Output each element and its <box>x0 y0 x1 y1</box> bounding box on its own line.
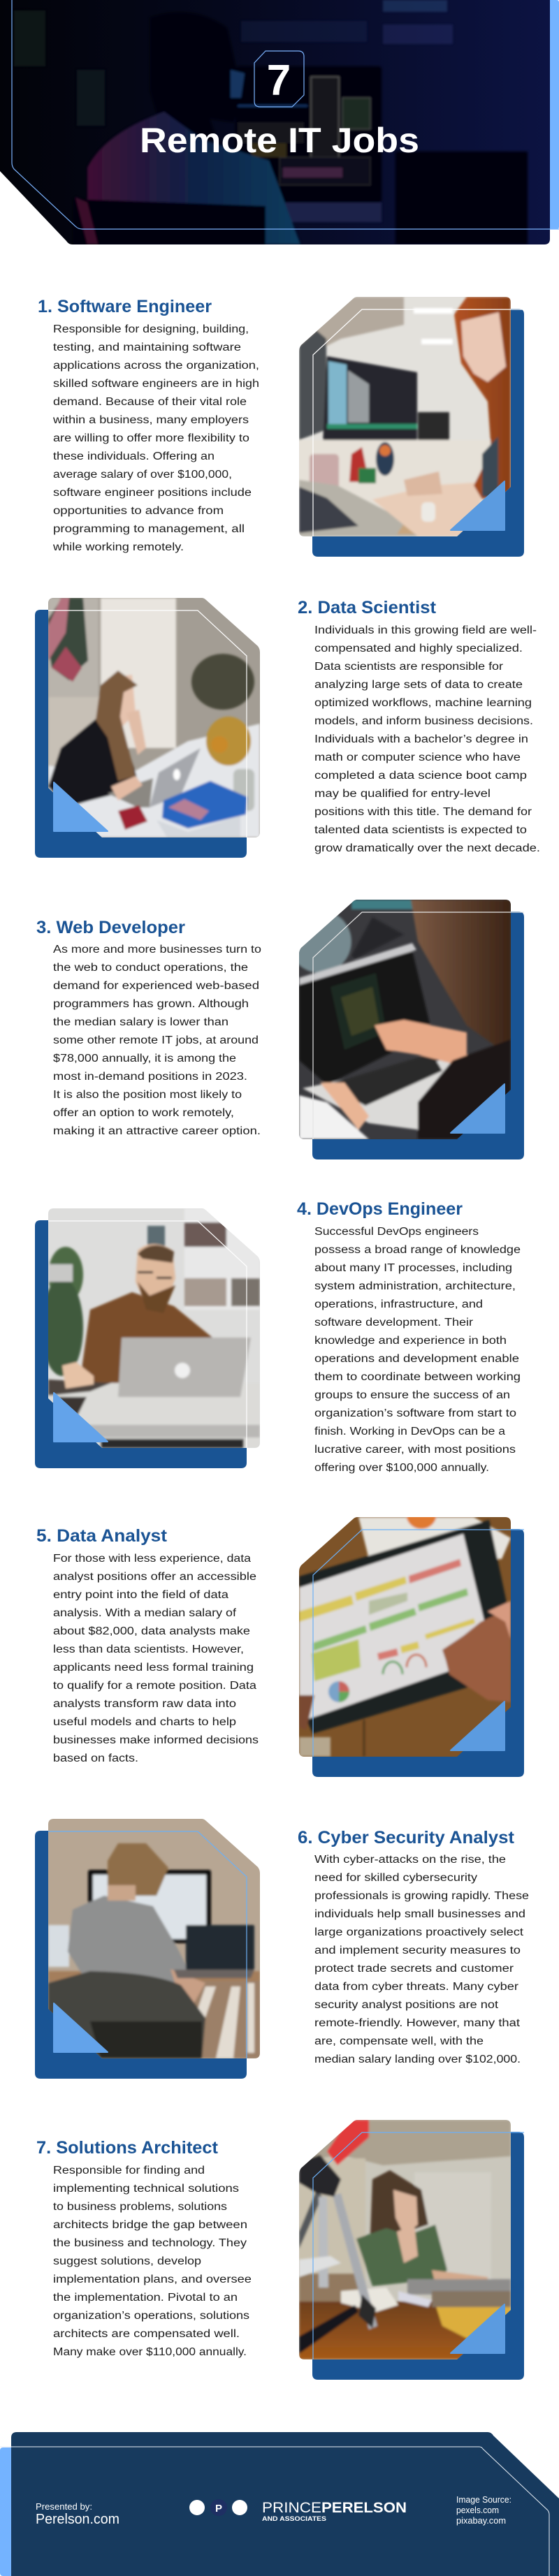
text block: some other remote IT jobs, at around <box>53 1034 259 1046</box>
panel: 4 devops engineer <box>35 1199 521 1474</box>
text block: grow dramatically over the next decade. <box>314 842 540 854</box>
text block: talented data scientists is expected to <box>314 824 527 836</box>
text block: less than data scientists. However, <box>53 1644 244 1655</box>
heading: 1. Software Engineer <box>38 297 212 316</box>
text block: finish. Working in DevOps can be a <box>314 1426 505 1437</box>
text block: positions with this title. The demand for <box>314 806 532 818</box>
panel: 6 cyber security analyst <box>35 1819 529 2079</box>
text block: and implement security measures to <box>314 1945 521 1956</box>
header outline <box>12 0 559 229</box>
text block: architects are compensated well. <box>53 2328 240 2340</box>
text block: within a business, many employers <box>52 414 249 426</box>
outline <box>313 2132 524 2359</box>
text block <box>53 944 261 1137</box>
text block <box>53 2165 252 2358</box>
text block: applicants need less formal training <box>53 1662 254 1674</box>
text block: applications across the organization, <box>53 360 259 372</box>
text block: analysis. With a median salary of <box>53 1607 237 1619</box>
text block: It is also the position most likely to <box>53 1089 242 1101</box>
text block: the business and technology. They <box>53 2237 247 2249</box>
number badge: 7 <box>267 57 291 105</box>
text block: For those with less experience, data <box>53 1553 251 1565</box>
text block: implementation plans, and oversee <box>53 2274 252 2285</box>
text block: $78,000 annually, it is among the <box>53 1053 236 1064</box>
text block: testing, and maintaining software <box>53 342 241 353</box>
footer outline <box>0 2447 549 2576</box>
outline <box>48 610 247 837</box>
text block: opportunities to advance from <box>53 505 224 517</box>
heading: 2. Data Scientist <box>298 598 437 617</box>
text block: individuals help small businesses and <box>314 1908 525 1920</box>
text block: analysts transform raw data into <box>53 1698 236 1710</box>
footer <box>0 2432 559 2576</box>
accent triangle <box>54 782 108 831</box>
text block: analyst positions offer an accessible <box>53 1571 256 1583</box>
photo card: woman at computer <box>299 297 524 557</box>
image sources: Image Source: <box>456 2494 511 2505</box>
text block: may be qualified for entry-level <box>314 788 491 800</box>
presented by: Presented by: <box>36 2501 92 2512</box>
text block: With cyber-attacks on the rise, the <box>314 1854 506 1866</box>
image sources: pexels.com <box>456 2505 499 2515</box>
text block: math or computer science who have <box>314 752 521 763</box>
text block: possess a broad range of knowledge <box>314 1244 521 1256</box>
accent triangle <box>54 1393 108 1442</box>
accent triangle <box>54 2003 108 2052</box>
text block: offer an option to work remotely, <box>53 1107 234 1119</box>
photo card: laptop with code <box>289 900 524 1159</box>
text block: offering over $100,000 annually. <box>314 1462 489 1474</box>
text block <box>314 1226 521 1474</box>
presented by: Perelson.com <box>36 2512 119 2527</box>
text block: compensated and highly specialized. <box>314 643 523 654</box>
accent triangle <box>451 2304 504 2353</box>
text block: useful models and charts to help <box>53 1716 236 1728</box>
text block: average salary of over $100,000, <box>53 469 232 481</box>
text block: to qualify for a remote position. Data <box>53 1680 256 1692</box>
header banner <box>0 0 559 244</box>
text block: software engineer positions include <box>53 487 252 499</box>
panel: 1 software engineer <box>38 297 524 557</box>
number badge <box>254 51 304 107</box>
heading: 5. Data Analyst <box>36 1526 168 1546</box>
text block: large organizations proactively select <box>314 1926 524 1938</box>
text block: the median salary is lower than <box>53 1016 228 1028</box>
text block: programming to management, all <box>53 523 245 535</box>
accent bar: header right <box>538 0 559 229</box>
text block: while working remotely. <box>52 541 184 553</box>
text block: implementing technical solutions <box>53 2183 239 2195</box>
text block: analyzing large sets of data to create <box>314 679 523 691</box>
text block: programmers has grown. Although <box>53 998 249 1010</box>
text block: median salary landing over $102,000. <box>314 2054 521 2065</box>
text block: Successful DevOps engineers <box>314 1226 479 1238</box>
text block: models, and inform business decisions. <box>314 715 533 727</box>
photo card: tablet with charts <box>299 1498 524 1777</box>
text block: Many make over $110,000 annually. <box>53 2346 247 2358</box>
outline <box>48 1831 247 2058</box>
text block: protect trade secrets and customer <box>314 1963 514 1975</box>
text block: As more and more businesses turn to <box>53 944 261 956</box>
outline <box>313 309 524 536</box>
text block: suggest solutions, develop <box>53 2255 201 2267</box>
panel: 7 solutions architect <box>36 2120 524 2380</box>
accent triangle <box>451 1084 504 1133</box>
image sources <box>456 2494 511 2526</box>
logo: prince perelson and associates: AND ASSOCIATES <box>262 2515 326 2523</box>
heading: 7. Solutions Architect <box>36 2138 219 2158</box>
text block: optimized workflows, machine learning <box>314 697 532 709</box>
text block: to business problems, solutions <box>53 2201 227 2213</box>
text block: most in-demand positions in 2023. <box>53 1071 247 1083</box>
text block: businesses make informed decisions <box>53 1734 259 1746</box>
text block: Responsible for finding and <box>53 2165 205 2176</box>
text block: the web to conduct operations, the <box>53 962 248 974</box>
text block: based on facts. <box>53 1752 138 1764</box>
text block: Individuals in this growing field are well- <box>314 624 537 636</box>
text block <box>52 323 259 553</box>
text block: Individuals with a bachelor’s degree in <box>314 733 528 745</box>
photo card: man with laptop <box>35 1208 260 1468</box>
photo card: woman with laptop <box>35 598 260 858</box>
photo card: person at desk from behind <box>35 1819 260 2079</box>
logo: prince perelson and associates: PERELSON <box>321 2500 407 2516</box>
text block: about many IT processes, including <box>314 1262 512 1274</box>
text block: these individuals. Offering an <box>53 451 215 462</box>
logo: prince perelson and associates <box>189 2499 407 2523</box>
text block: operations and development enable <box>314 1353 519 1365</box>
heading: 6. Cyber Security Analyst <box>298 1828 515 1847</box>
text block: about $82,000, data analysts make <box>53 1625 250 1637</box>
text block: need for skilled cybersecurity <box>314 1872 477 1884</box>
text block: demand. Because of their vital role <box>53 396 247 408</box>
accent bar: footer left <box>0 2447 21 2576</box>
title: Remote IT Jobs <box>140 121 419 160</box>
photo card: woman writing behind tripod <box>299 2120 524 2380</box>
text block: Responsible for designing, building, <box>53 323 249 335</box>
heading: 3. Web Developer <box>36 918 185 937</box>
text block: security analyst positions are not <box>314 1999 499 2011</box>
outline <box>313 1530 524 1757</box>
outline <box>313 912 524 1139</box>
text block: entry point into the field of data <box>53 1589 228 1601</box>
text block: groups to ensure the success of an <box>314 1389 510 1401</box>
panel: 5 data analyst <box>36 1498 524 1777</box>
accent triangle <box>451 481 504 530</box>
text block: lucrative career, with most positions <box>314 1444 516 1456</box>
text block: skilled software engineers are in high <box>53 378 259 390</box>
text block: them to coordinate between working <box>314 1371 521 1383</box>
presented by <box>36 2501 119 2527</box>
text block: operations, infrastructure, and <box>314 1298 483 1310</box>
text block: organization’s software from start to <box>314 1407 516 1419</box>
text block: knowledge and experience in both <box>314 1335 507 1347</box>
text block: data from cyber threats. Many cyber <box>314 1981 518 1993</box>
logo: prince perelson and associates: P <box>215 2503 222 2515</box>
text block: are willing to offer more flexibility to <box>53 432 249 444</box>
text block: professionals is growing rapidly. These <box>314 1890 529 1902</box>
text block: the implementation. Pivotal to an <box>53 2292 238 2304</box>
text block: making it an attractive career option. <box>53 1125 261 1137</box>
text block: remote-friendly. However, many that <box>314 2017 521 2029</box>
text block: demand for experienced web-based <box>53 980 259 992</box>
text block <box>314 624 540 854</box>
outline <box>48 1221 247 1448</box>
footer background <box>11 2432 559 2576</box>
panel: 3 web developer <box>36 900 524 1159</box>
text block: organization’s operations, solutions <box>53 2310 249 2322</box>
accent triangle <box>451 1702 504 1750</box>
image sources: pixabay.com <box>456 2515 506 2526</box>
text block: Data scientists are responsible for <box>314 661 503 673</box>
logo: prince perelson and associates: PRINCE <box>262 2500 321 2516</box>
text block <box>314 1854 529 2065</box>
text block <box>53 1553 259 1764</box>
text block: are, compensate well, with the <box>314 2035 484 2047</box>
text block: architects bridge the gap between <box>53 2219 247 2231</box>
heading: 4. DevOps Engineer <box>297 1199 463 1219</box>
text block: software development. Their <box>314 1317 473 1329</box>
panel: 2 data scientist <box>35 598 540 858</box>
text block: completed a data science boot camp <box>314 770 527 782</box>
text block: system administration, architecture, <box>314 1280 516 1292</box>
header photo: person coding at monitor <box>0 0 550 244</box>
